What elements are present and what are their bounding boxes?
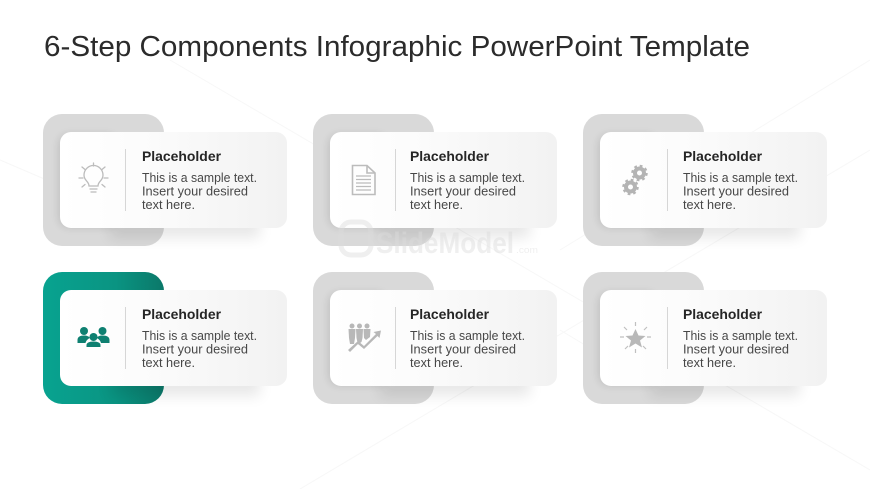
- icon: gears: [624, 166, 646, 194]
- step 5 heading: Placeholder: [410, 306, 490, 322]
- step 4 text: text here.: [142, 355, 195, 370]
- step 5 text: Insert your desired: [410, 342, 516, 356]
- step 1 heading: Placeholder: [142, 148, 222, 164]
- step 2 text: [410, 170, 525, 212]
- watermark: .com: [516, 245, 538, 255]
- icon: shining star: [620, 322, 651, 353]
- step 3 heading: Placeholder: [683, 148, 763, 164]
- icon: light bulb: [79, 163, 108, 192]
- title: 6-Step Components Infographic PowerPoint Template: [44, 31, 750, 63]
- step 4 text: Insert your desired: [142, 342, 248, 356]
- panel: step 6: [583, 272, 827, 404]
- step 2 text: Insert your desired: [410, 184, 516, 198]
- watermark: [341, 222, 538, 260]
- step 1 text: text here.: [142, 197, 195, 212]
- icon: team: [78, 327, 110, 347]
- panel: step 1: [43, 114, 287, 246]
- panel: step 4 (highlighted): [43, 272, 287, 404]
- step 3 text: [683, 170, 798, 212]
- step 3 text: text here.: [683, 197, 736, 212]
- step 6 text: Insert your desired: [683, 342, 789, 356]
- panel: step 2: [313, 114, 557, 246]
- icon: people with growth arrow: [348, 324, 381, 352]
- step 3 text: This is a sample text.: [683, 170, 798, 185]
- step 1 text: This is a sample text.: [142, 170, 257, 185]
- step 4 heading: Placeholder: [142, 306, 222, 322]
- step 5 text: text here.: [410, 355, 463, 370]
- watermark: SlideModel: [376, 227, 514, 260]
- step 5 text: This is a sample text.: [410, 328, 525, 343]
- panel: step 3: [583, 114, 827, 246]
- step 3 text: Insert your desired: [683, 184, 789, 198]
- step 2 text: This is a sample text.: [410, 170, 525, 185]
- step 1 text: Insert your desired: [142, 184, 248, 198]
- icon: document: [352, 166, 375, 194]
- step 4 text: [142, 328, 257, 370]
- step 6 text: This is a sample text.: [683, 328, 798, 343]
- step 6 text: text here.: [683, 355, 736, 370]
- step 2 heading: Placeholder: [410, 148, 490, 164]
- step 1 text: [142, 170, 257, 212]
- step 2 text: text here.: [410, 197, 463, 212]
- step 4 text: This is a sample text.: [142, 328, 257, 343]
- step 5 text: [410, 328, 525, 370]
- step 6 text: [683, 328, 798, 370]
- step 6 heading: Placeholder: [683, 306, 763, 322]
- panel: step 5: [313, 272, 557, 404]
